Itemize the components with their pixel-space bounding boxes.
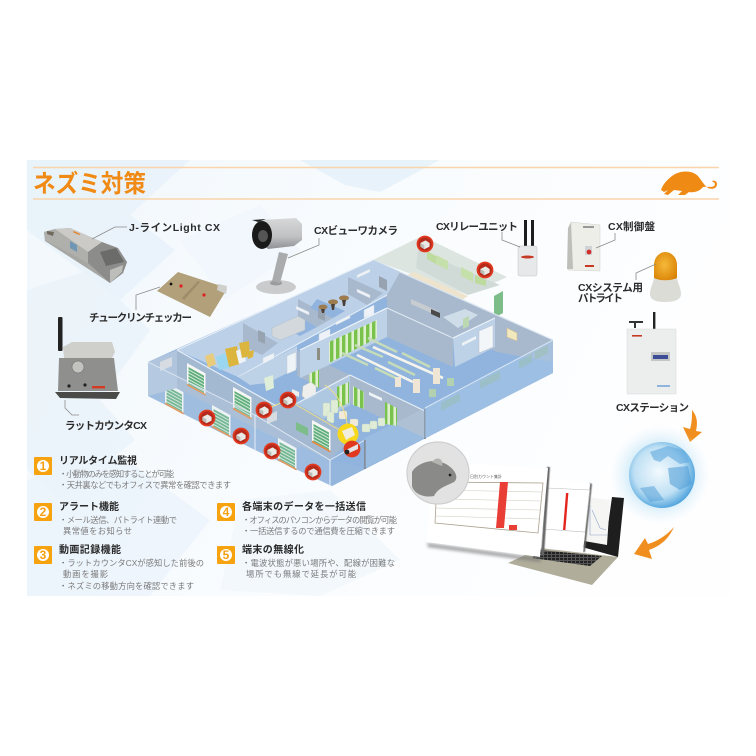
feature 1: real-time monitoring (34, 454, 231, 490)
label: CX viewer camera: CXビューワカメラ (314, 224, 398, 237)
icon: number 3: 3 (40, 548, 47, 562)
icon: globe server (575, 425, 710, 525)
label: CX control panel: CX制御盤 (608, 220, 656, 233)
rear room box (387, 295, 453, 367)
roof level relay area (373, 236, 507, 300)
icon: number 5: 5 (223, 548, 230, 562)
icon: globe server: サーバ (575, 441, 599, 450)
heading: 動画記録機能 (59, 543, 121, 556)
large room floor equipment (342, 338, 454, 397)
center partition wall (290, 375, 350, 437)
background panel (27, 160, 730, 596)
feature 2: alert function: 異常値をお知らせ (63, 526, 132, 536)
icon: number 3 (34, 546, 52, 564)
laptop (508, 497, 624, 585)
leader line (65, 400, 79, 415)
header rules (33, 168, 719, 199)
feature 5: wireless terminals (217, 543, 395, 579)
left front floor (148, 388, 255, 450)
lower left room back wall (255, 400, 355, 460)
left translucent wall and panel (148, 350, 177, 396)
feature 1: real-time monitoring: ・天井裏などでもオフィスで異常を確認できます (59, 480, 231, 490)
label: patrol light: CXシステム用 (578, 282, 643, 294)
front-left back wall with shutters (177, 350, 300, 450)
leader line (502, 232, 520, 247)
heading: リアルタイム監視 (59, 454, 137, 467)
heading: アラート機能 (59, 500, 119, 513)
large room back wall with curtains (300, 308, 387, 378)
rear wall right (373, 260, 553, 362)
device: CX control panel (567, 222, 615, 271)
device: relay unit (502, 220, 537, 276)
sheet 1 (427, 462, 550, 562)
icon: number 4: 4 (223, 505, 230, 519)
leader line (596, 233, 615, 248)
icon: number 2: 2 (40, 505, 47, 519)
stock boxes (205, 341, 254, 370)
translucent front walls (148, 362, 255, 450)
leader line (92, 227, 127, 239)
feature 4: bulk transmission (217, 500, 398, 536)
feature 3: video recording: 動画を撮影 (63, 569, 109, 579)
device: CX station (627, 312, 676, 394)
icon: number 5 (217, 546, 235, 564)
icon: number 4 (217, 503, 235, 521)
center room (238, 350, 350, 407)
rat photo (407, 442, 469, 504)
label: rat counter CX: ラットカウンタCX (65, 420, 147, 432)
device: Chuklin checker (136, 272, 227, 317)
title: ネズミ対策 (33, 169, 146, 198)
sheet 2 (538, 478, 592, 552)
feature 3: video recording: ・ネズミの移動方向を確認できます (59, 581, 194, 591)
glow: alert (338, 424, 358, 444)
icon: number 1 (34, 457, 52, 475)
camera sensor (344, 441, 360, 457)
wiring (264, 385, 348, 435)
text block: ・ラットカウンタCXが感知した前後の (59, 558, 204, 568)
device: J-line Light CX (44, 227, 127, 283)
building shell (148, 260, 553, 486)
sink (272, 316, 305, 340)
text block: ・電波状態が悪い場所や、配線が困難な (242, 558, 395, 568)
icon: number 1: 1 (40, 459, 47, 473)
label: patrol light: パトライト (578, 292, 623, 304)
feature 5: wireless terminals: 場所でも無線で延長が可能 (246, 569, 357, 579)
leader line (136, 287, 160, 310)
label: Chuklin checker: チュークリンチェッカー (89, 312, 192, 324)
machines (318, 295, 349, 313)
feature 3: video recording (34, 543, 204, 591)
standalone door (494, 291, 503, 318)
heading: 端末の無線化 (242, 543, 304, 556)
AC units and panels (263, 269, 374, 375)
label: J-line Light CX: J-ラインLight CX (129, 222, 220, 234)
report sheets (407, 442, 610, 562)
feature 2: alert function (34, 500, 177, 536)
storage tanks (323, 400, 385, 432)
back rooms strip (177, 260, 400, 377)
building isometric floor plan (148, 236, 553, 486)
label: relay unit: CXリレーユニット (436, 221, 518, 233)
text block: ・小動物のみを感知することが可能 (59, 469, 175, 479)
arrow: station to server (683, 410, 702, 442)
arrow: server to laptop (634, 527, 674, 559)
icon: rat (661, 172, 717, 195)
icon: number 2 (34, 503, 52, 521)
leader line (288, 238, 319, 258)
label: CX station: CXステーション (616, 402, 689, 414)
device: CX viewer camera (252, 218, 319, 294)
text block: ・メール送信、パトライト連動で (59, 515, 177, 525)
front right room (290, 375, 425, 468)
wall panel (507, 328, 517, 341)
feature 4: bulk transmission: ・一括送信するので通信費を圧縮できます (242, 526, 395, 536)
device: rat counter CX (55, 317, 120, 415)
front edge of back rooms (238, 295, 387, 377)
text block: ・オフィスのパソコンからデータの閲覧が可能 (242, 515, 398, 525)
sensors (199, 236, 493, 480)
sheet 3 (584, 497, 610, 545)
partition walls in back rooms (243, 323, 278, 355)
heading: 各端末のデータを一括送信 (242, 500, 366, 513)
sheet 1: 日別カウント集計 (470, 473, 502, 479)
leader line (636, 264, 656, 280)
device: patrol light (636, 252, 681, 302)
